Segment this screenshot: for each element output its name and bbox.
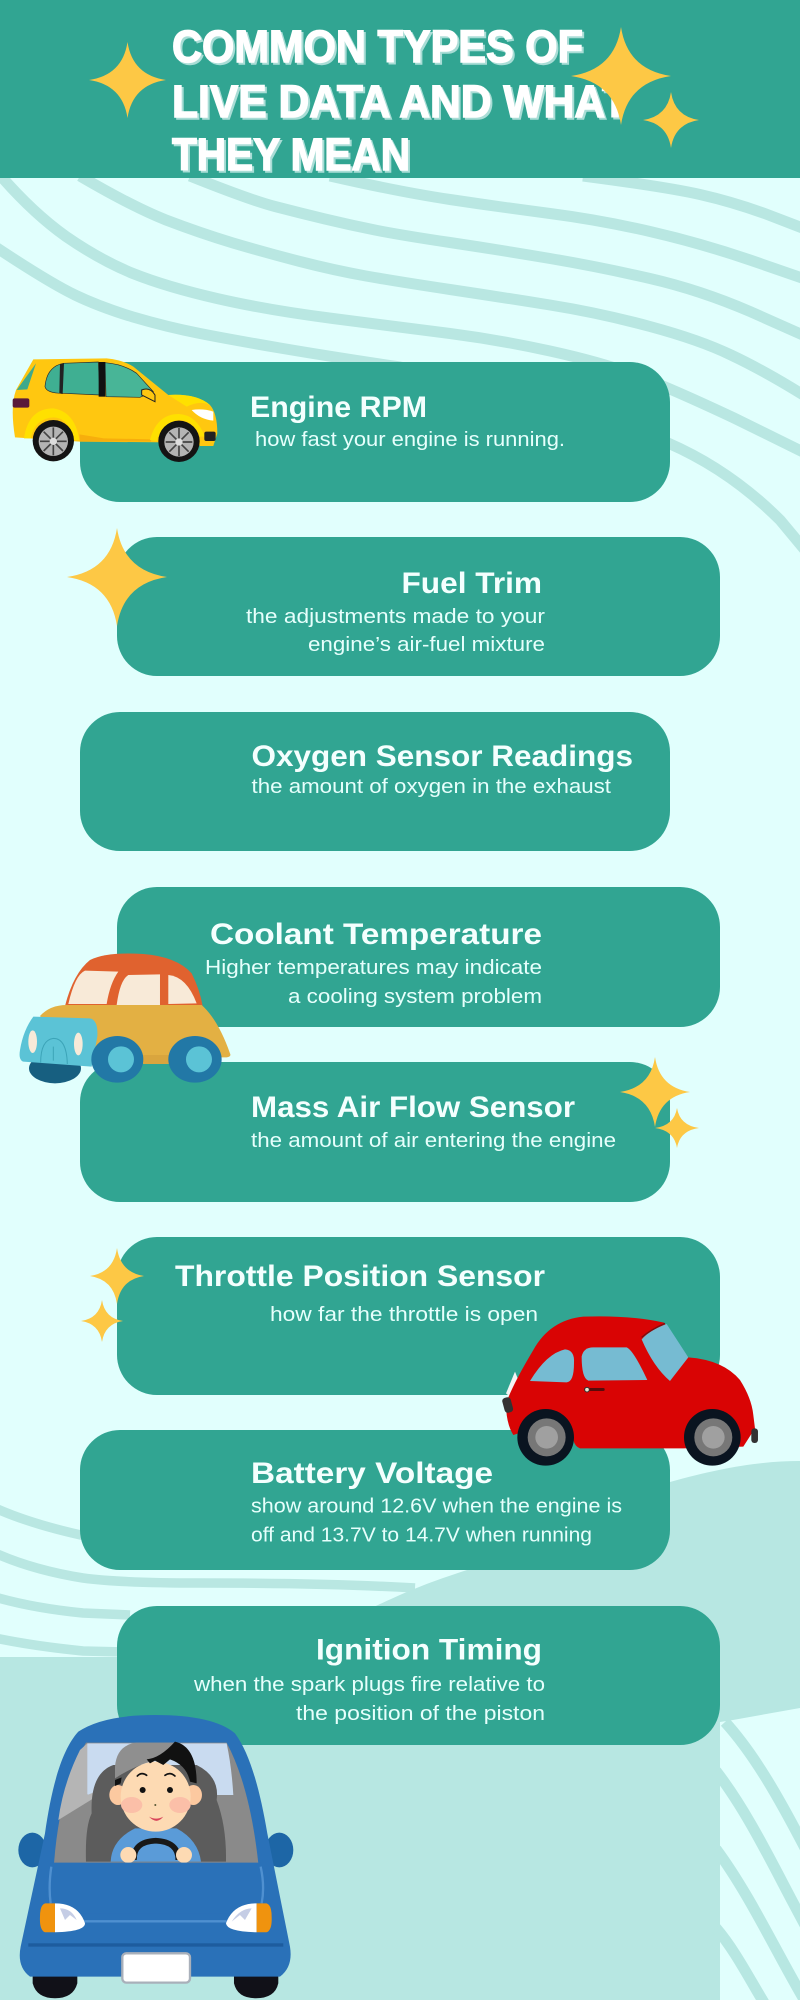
description: when the spark plugs fire relative to — [193, 1673, 545, 1696]
icon: throttle sparkle small — [81, 1300, 123, 1342]
panel: Mass Air Flow Sensor — [80, 1062, 670, 1202]
description: the adjustments made to your — [246, 605, 545, 628]
heading: Ignition Timing — [316, 1634, 542, 1666]
icon: blue car with driver — [18, 1715, 293, 1998]
icon: fuel trim sparkle — [67, 528, 167, 626]
heading: Engine RPM — [250, 391, 427, 424]
icon: retro cream and blue car — [20, 953, 230, 1083]
description: off and 13.7V to 14.7V when running — [251, 1524, 592, 1546]
icon: header sparkle large — [571, 27, 671, 125]
description: engine’s air-fuel mixture — [308, 633, 545, 656]
description — [246, 605, 545, 656]
panel: Engine RPM — [80, 362, 670, 502]
panel: Coolant Temperature — [117, 887, 720, 1027]
description: the amount of oxygen in the exhaust — [252, 775, 611, 798]
description: the amount of air entering the engine — [251, 1129, 616, 1152]
icon: mass air flow sparkle small — [655, 1108, 699, 1148]
icon: red car — [501, 1316, 758, 1466]
title: THEY MEAN — [172, 129, 410, 180]
description: Higher temperatures may indicate — [205, 956, 542, 979]
description: the position of the piston — [296, 1702, 545, 1725]
title — [172, 21, 628, 180]
icon: mass air flow sparkle large — [620, 1057, 690, 1127]
header band — [0, 0, 800, 178]
description — [193, 1673, 545, 1725]
icon: throttle sparkle large — [90, 1248, 144, 1304]
heading: Mass Air Flow Sensor — [251, 1091, 575, 1124]
panel: Oxygen Sensor Readings — [80, 712, 670, 851]
panel: Ignition Timing — [117, 1606, 720, 1745]
icon: header sparkle left — [89, 42, 166, 118]
title: LIVE DATA AND WHAT — [172, 76, 628, 127]
heading: Coolant Temperature — [210, 918, 542, 951]
panel: Throttle Position Sensor — [117, 1237, 720, 1395]
panel: Fuel Trim — [117, 537, 720, 676]
title: COMMON TYPES OF — [172, 21, 583, 72]
panel: Battery Voltage — [80, 1430, 670, 1570]
description: how far the throttle is open — [270, 1303, 538, 1326]
heading: Oxygen Sensor Readings — [252, 740, 633, 773]
description — [205, 956, 542, 1008]
description — [251, 1494, 622, 1546]
description: how fast your engine is running. — [255, 428, 565, 451]
heading: Battery Voltage — [251, 1457, 493, 1490]
description: a cooling system problem — [288, 985, 542, 1008]
description: show around 12.6V when the engine is — [251, 1494, 622, 1518]
icon: yellow car — [13, 358, 217, 462]
heading: Fuel Trim — [402, 567, 542, 600]
heading: Throttle Position Sensor — [175, 1260, 545, 1293]
icon: header sparkle small — [643, 92, 699, 148]
